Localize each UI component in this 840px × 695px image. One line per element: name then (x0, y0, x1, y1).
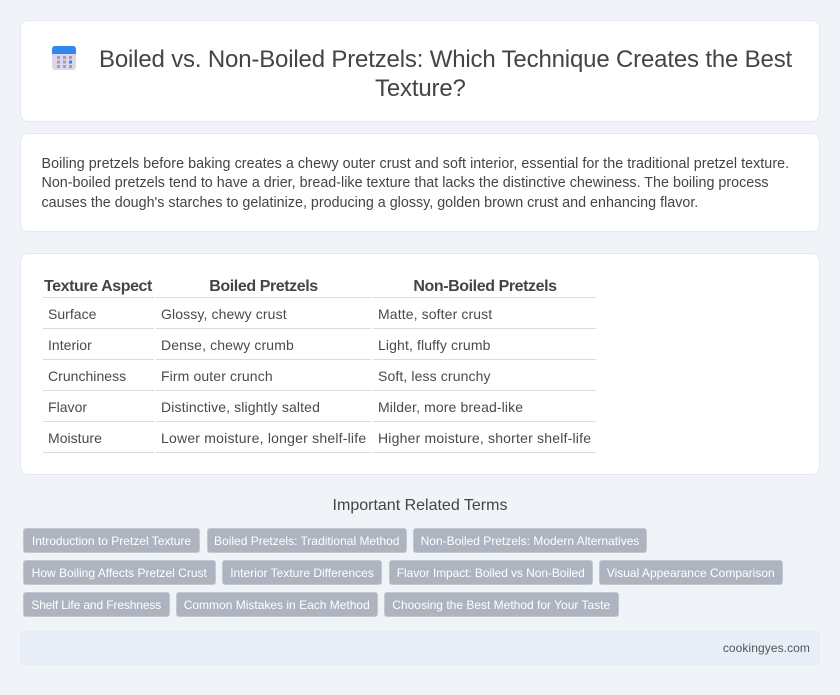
chip: Flavor Impact: Boiled vs Non-Boiled (397, 566, 585, 580)
heading: related terms: Important Related Terms (333, 497, 507, 514)
panel: title header (20, 20, 820, 122)
row: moisture: Moisture (48, 430, 102, 446)
chip (389, 560, 592, 585)
chip (384, 592, 618, 617)
footer bar (20, 631, 820, 665)
chip: Introduction to Pretzel Texture (32, 534, 191, 548)
row: moisture: Higher moisture, shorter shelf-life (378, 430, 591, 446)
table header: Non-Boiled Pretzels (413, 278, 557, 295)
row: interior: Light, fluffy crumb (378, 337, 491, 353)
row: surface: Surface (48, 306, 96, 322)
chip: Boiled Pretzels: Traditional Method (214, 534, 399, 548)
row: crunchiness: Firm outer crunch (161, 368, 273, 384)
chip: Non-Boiled Pretzels: Modern Alternatives (421, 534, 639, 548)
footer source label: cookingyes.com (723, 641, 810, 655)
row: flavor: Distinctive, slightly salted (161, 399, 320, 415)
row: interior: Dense, chewy crumb (161, 337, 294, 353)
row: interior (48, 337, 491, 353)
chip: Common Mistakes in Each Method (184, 598, 370, 612)
panel: comparison table (20, 253, 820, 475)
chip (176, 592, 378, 617)
chip: Shelf Life and Freshness (31, 598, 161, 612)
row: surface (48, 306, 492, 322)
chip: Interior Texture Differences (230, 566, 374, 580)
row: surface: Glossy, chewy crust (161, 306, 287, 322)
intro paragraph (42, 156, 789, 211)
chip (222, 560, 382, 585)
row: flavor: Milder, more bread-like (378, 399, 523, 415)
intro paragraph: causes the dough's starches to gelatinize, producing a glossy, golden brown crust and enhancing flavor. (42, 195, 698, 211)
title: Texture? (375, 75, 466, 102)
title: Boiled vs. Non-Boiled Pretzels: Which Technique Creates the Best (99, 46, 792, 72)
row: moisture: Lower moisture, longer shelf-life (161, 430, 366, 446)
chip: Visual Appearance Comparison (607, 566, 775, 580)
row: flavor (48, 399, 523, 415)
intro paragraph: Non-boiled pretzels tend to have a drier, bread-like texture that lacks the distinctive chewiness. The boiling process (42, 175, 769, 191)
chip: How Boiling Affects Pretzel Crust (32, 566, 207, 580)
row: crunchiness: Crunchiness (48, 368, 126, 384)
table header: Texture Aspect (44, 278, 152, 295)
intro paragraph: Boiling pretzels before baking creates a chewy outer crust and soft interior, essential for the traditional pretzel texture. (42, 156, 789, 172)
row: flavor: Flavor (48, 399, 87, 415)
row: moisture (48, 430, 591, 446)
related term chips (23, 528, 783, 617)
row: crunchiness (48, 368, 491, 384)
table header: Boiled Pretzels (209, 278, 318, 295)
chip (23, 592, 170, 617)
chip (206, 528, 407, 553)
chip (413, 528, 647, 553)
chip: Choosing the Best Method for Your Taste (392, 598, 610, 612)
chip (23, 528, 200, 553)
chip (599, 560, 782, 585)
chip (23, 560, 216, 585)
table header (44, 278, 557, 295)
panel: introduction text (20, 133, 820, 232)
row: crunchiness: Soft, less crunchy (378, 368, 491, 384)
icon: calendar grid (52, 46, 76, 70)
row: interior: Interior (48, 337, 92, 353)
row: surface: Matte, softer crust (378, 306, 492, 322)
title (99, 46, 792, 102)
